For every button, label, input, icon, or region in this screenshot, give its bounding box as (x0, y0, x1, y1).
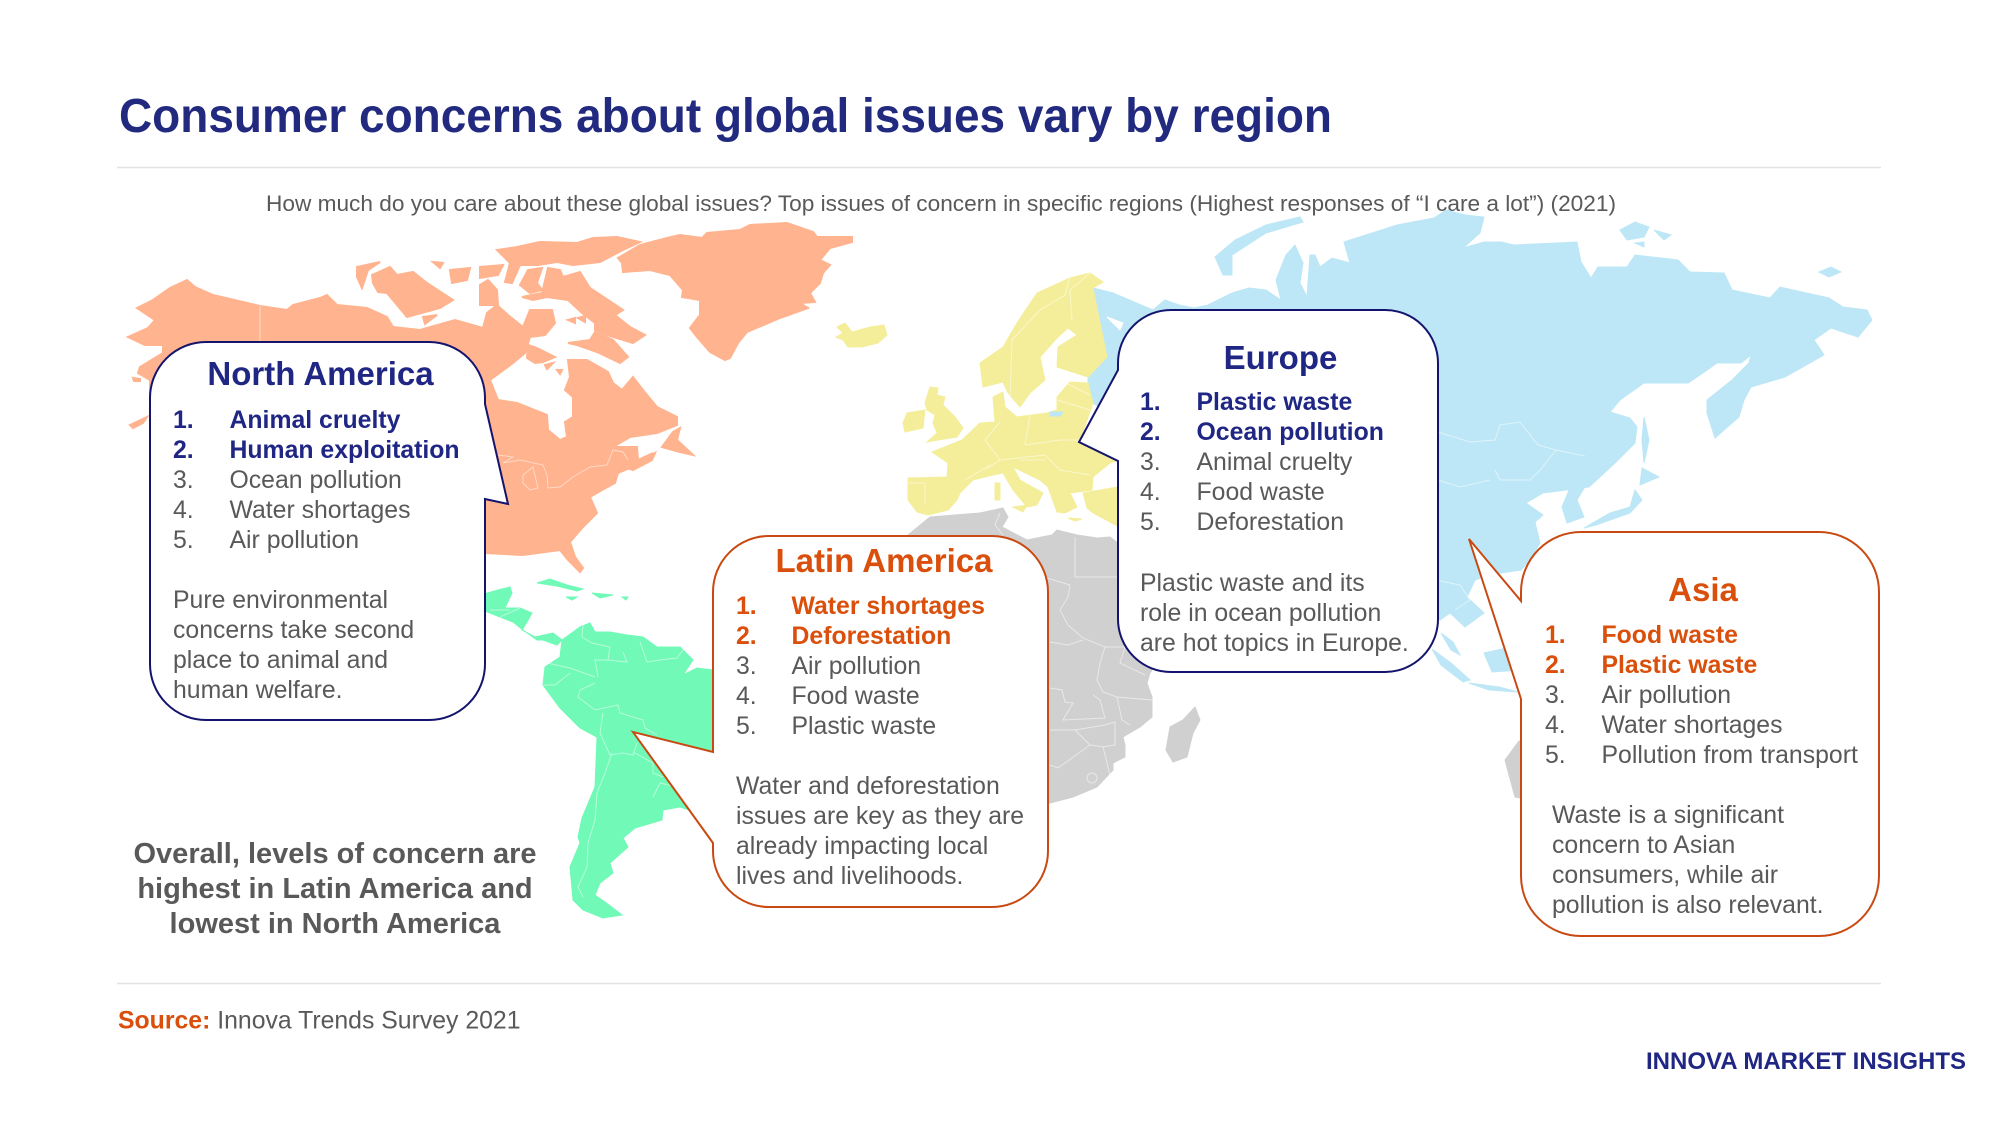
world map (128, 210, 1872, 918)
commentary: concerns take second (173, 617, 414, 644)
ranked list: 5. (736, 713, 757, 740)
heading: Europe (1224, 339, 1337, 376)
ranked list: Plastic waste (1602, 652, 1757, 679)
callout bubble (633, 536, 1048, 907)
region: Africa and Australia (900, 508, 1530, 805)
ranked list: 4. (1545, 712, 1566, 739)
commentary: place to animal and (173, 647, 388, 674)
callout: North America (150, 342, 508, 720)
commentary: Waste is a significant (1552, 802, 1784, 829)
callout bubble (1079, 310, 1438, 672)
ranked list: 2. (1545, 652, 1566, 679)
ranked list: Air pollution (792, 653, 921, 680)
commentary: Plastic waste and its (1140, 570, 1365, 597)
ranked list: Water shortages (230, 497, 411, 524)
ranked list: 1. (173, 407, 194, 434)
ranked list: Animal cruelty (230, 407, 401, 434)
ranked list: 1. (1545, 622, 1566, 649)
commentary: human welfare. (173, 677, 343, 704)
ranked list (736, 593, 985, 740)
ranked list: 2. (173, 437, 194, 464)
ranked list: 3. (1140, 449, 1161, 476)
ranked list: Food waste (1602, 622, 1738, 649)
ranked list (1545, 622, 1858, 769)
ranked list: Plastic waste (1196, 389, 1352, 416)
heading: Asia (1668, 571, 1738, 608)
overall takeaway text: lowest in North America (170, 908, 501, 940)
ranked list: 5. (1545, 742, 1566, 769)
ranked list: Ocean pollution (1196, 419, 1384, 446)
callout bubble (150, 342, 508, 720)
ranked list: Human exploitation (230, 437, 460, 464)
ranked list: Deforestation (1196, 509, 1344, 536)
ranked list: Animal cruelty (1196, 449, 1353, 476)
ranked list: Food waste (1196, 479, 1325, 506)
ranked list: 4. (736, 683, 757, 710)
ranked list: Water shortages (1602, 712, 1783, 739)
ranked list: 1. (736, 593, 757, 620)
commentary: lives and livelihoods. (736, 863, 963, 890)
ranked list: Food waste (792, 683, 920, 710)
commentary: pollution is also relevant. (1552, 892, 1824, 919)
ranked list: Air pollution (230, 527, 359, 554)
ranked list: 2. (736, 623, 757, 650)
commentary: already impacting local (736, 833, 988, 860)
commentary: Pure environmental (173, 587, 388, 614)
ranked list: 3. (1545, 682, 1566, 709)
ranked list: Air pollution (1602, 682, 1731, 709)
commentary: concern to Asian (1552, 832, 1735, 859)
callout: Asia (1469, 532, 1879, 936)
ranked list (173, 407, 460, 554)
ranked list: 5. (1140, 509, 1161, 536)
ranked list: Deforestation (792, 623, 951, 650)
ranked list: 4. (173, 497, 194, 524)
overall takeaway text: highest in Latin America and (137, 873, 533, 905)
region: Latin America (470, 579, 760, 918)
source note: Source: Innova Trends Survey 2021 (118, 1008, 520, 1034)
commentary: are hot topics in Europe. (1140, 630, 1409, 657)
region: Europe (836, 273, 1125, 530)
ranked list: 4. (1140, 479, 1161, 506)
ranked list: Water shortages (792, 593, 985, 620)
callout: Latin America (633, 536, 1048, 907)
callout: Europe (1079, 310, 1438, 672)
ranked list: 2. (1140, 419, 1161, 446)
heading: North America (207, 355, 434, 392)
region: Asia (1088, 210, 1872, 692)
ranked list: 5. (173, 527, 194, 554)
callout bubble (1469, 532, 1879, 936)
ranked list: 3. (736, 653, 757, 680)
ranked list: Pollution from transport (1602, 742, 1858, 769)
brand name: INNOVA MARKET INSIGHTS (1646, 1048, 1966, 1075)
heading: Latin America (775, 542, 993, 579)
ranked list (1140, 389, 1384, 536)
ranked list: Plastic waste (792, 713, 936, 740)
ranked list: Ocean pollution (230, 467, 402, 494)
commentary: consumers, while air (1552, 862, 1778, 889)
ranked list: 3. (173, 467, 194, 494)
title: Consumer concerns about global issues vary by region (119, 90, 1332, 143)
commentary: issues are key as they are (736, 803, 1024, 830)
region: North America (128, 223, 852, 572)
subtitle: How much do you care about these global issues? Top issues of concern in specific regions (Highest responses of “I care a lot”) (2021) (266, 191, 1616, 216)
ranked list: 1. (1140, 389, 1161, 416)
overall takeaway text: Overall, levels of concern are (134, 838, 536, 870)
commentary: Water and deforestation (736, 773, 1000, 800)
commentary: role in ocean pollution (1140, 600, 1381, 627)
